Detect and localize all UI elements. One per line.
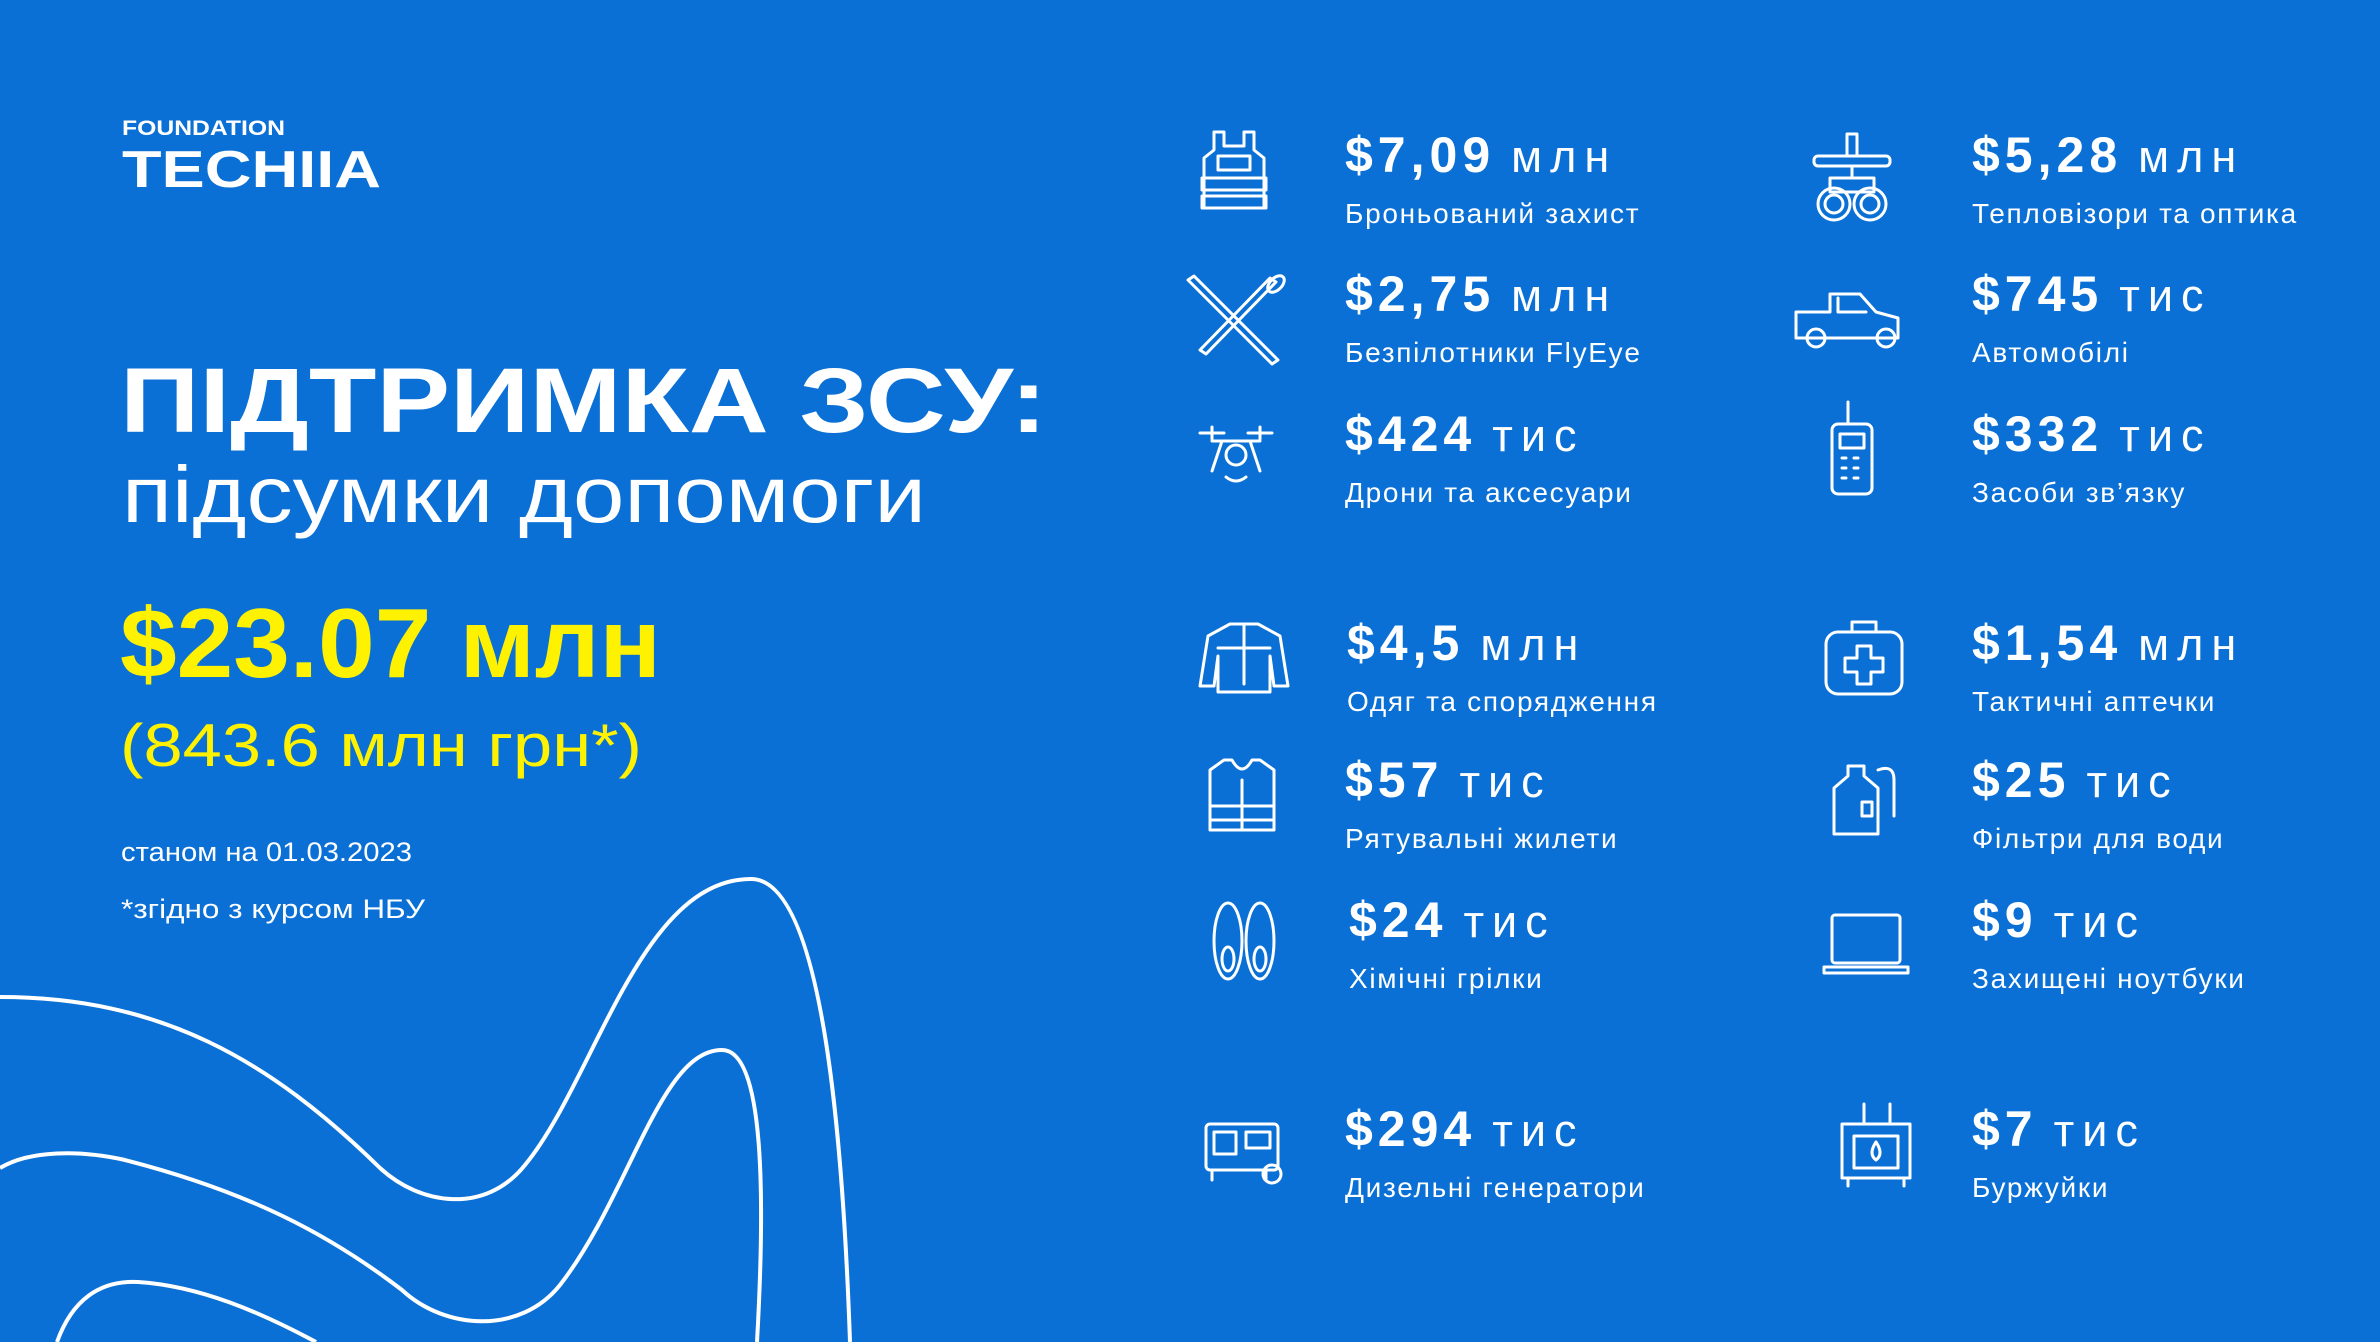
item: FlyEye UAV: Безпілотники FlyEye	[1345, 337, 1642, 368]
item: armor: $7,09 млн	[1345, 127, 1617, 183]
item: water filters: $25 тис	[1972, 752, 2179, 808]
item: stoves: $7 тис	[1972, 1101, 2146, 1157]
item: life vests: Рятувальні жилети	[1345, 823, 1618, 854]
item: armor	[1202, 127, 1640, 229]
item: first aid: Тактичні аптечки	[1972, 686, 2216, 717]
item: radio: Засоби зв’язку	[1972, 477, 2186, 508]
logo: TECHIIA	[122, 141, 381, 199]
item: radio	[1832, 402, 2211, 508]
item: thermal optics: $5,28 млн	[1972, 127, 2244, 183]
item: life vests: $57 тис	[1345, 752, 1552, 808]
item: cars	[1796, 266, 2211, 368]
item: thermal optics	[1814, 127, 2298, 229]
item: radio: $332 тис	[1972, 406, 2211, 462]
item: drones: $424 тис	[1345, 406, 1584, 462]
item: generators	[1206, 1101, 1646, 1203]
item: clothing: $4,5 млн	[1347, 615, 1586, 671]
item: laptops: $9 тис	[1972, 892, 2146, 948]
item: cars: Автомобілі	[1972, 337, 2130, 368]
item: generators: $294 тис	[1345, 1101, 1584, 1157]
item: clothing: Одяг та спорядження	[1347, 686, 1658, 717]
footnote: *згідно з курсом НБУ	[121, 894, 426, 924]
item: FlyEye UAV: $2,75 млн	[1345, 266, 1617, 322]
item: laptops	[1824, 892, 2246, 994]
item: stoves	[1842, 1101, 2146, 1203]
item: thermal optics: Тепловізори та оптика	[1972, 198, 2298, 229]
item: first aid	[1826, 615, 2244, 717]
item: drones: Дрони та аксесуари	[1345, 477, 1633, 508]
item: laptops: Захищені ноутбуки	[1972, 963, 2246, 994]
item: first aid: $1,54 млн	[1972, 615, 2244, 671]
item: cars: $745 тис	[1972, 266, 2211, 322]
item: clothing	[1200, 615, 1658, 717]
item: life vests	[1210, 752, 1618, 854]
subtitle: підсумки допомоги	[122, 450, 926, 539]
item: generators: Дизельні генератори	[1345, 1172, 1646, 1203]
date note: станом на 01.03.2023	[121, 837, 412, 867]
item: hand warmers	[1214, 892, 1556, 994]
title: ПІДТРИМКА ЗСУ:	[120, 350, 1047, 452]
item: drones	[1200, 406, 1633, 508]
logo	[122, 117, 381, 199]
item: hand warmers: Хімічні грілки	[1349, 963, 1543, 994]
amount in UAH: (843.6 млн грн*)	[120, 712, 642, 779]
item: hand warmers: $24 тис	[1349, 892, 1556, 948]
total amount: $23.07 млн	[120, 588, 661, 698]
item: water filters: Фільтри для води	[1972, 823, 2224, 854]
item: FlyEye UAV	[1188, 266, 1642, 368]
item: water filters	[1834, 752, 2224, 854]
item: armor: Броньований захист	[1345, 198, 1640, 229]
logo: FOUNDATION	[122, 117, 285, 140]
item: stoves: Буржуйки	[1972, 1172, 2109, 1203]
